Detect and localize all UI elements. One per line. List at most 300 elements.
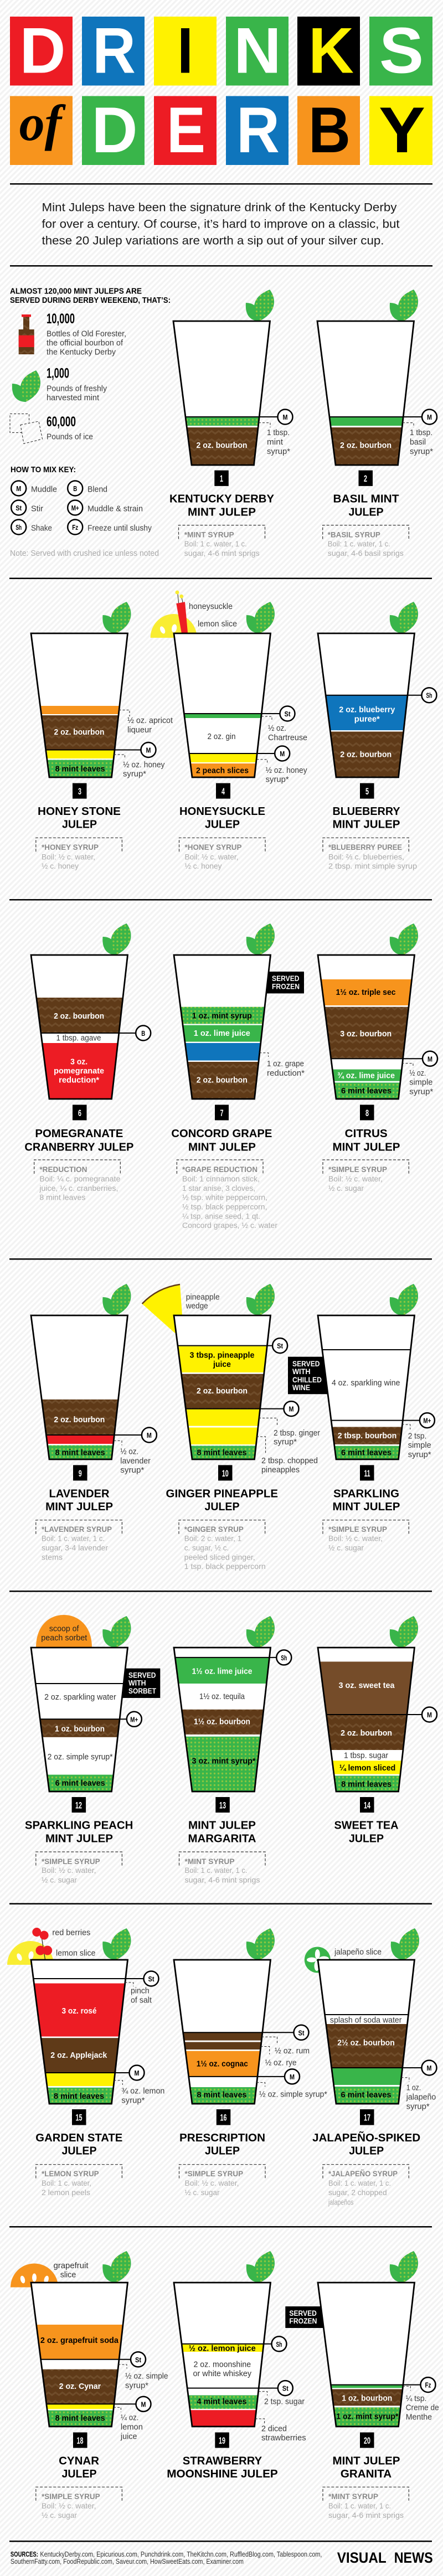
key note: Note: Served with crushed ice unless noted — [10, 549, 159, 558]
glass 20: Menthe — [406, 2412, 432, 2422]
recipe 7: ¼ tsp. anise seed, 1 qt. — [182, 1211, 260, 1220]
recipe 4 — [179, 838, 265, 870]
number badge 4 — [216, 783, 230, 799]
glass 8 — [318, 923, 437, 1099]
key: freeze — [68, 519, 152, 535]
recipe 3 — [36, 838, 122, 870]
stats heading — [10, 287, 171, 305]
drink title 4: JULEP — [205, 818, 240, 831]
glass 12: 2 oz. sparkling water — [44, 1692, 116, 1702]
drink title 15 — [35, 2131, 122, 2157]
recipe 15: 2 lemon peels — [42, 2188, 90, 2197]
glass 13: 3 oz. mint syrup* — [192, 1756, 256, 1765]
number badge 16: 16 — [220, 2113, 227, 2123]
glass 20: 1 oz. bourbon — [342, 2394, 392, 2403]
garnish: peach sorbet scoop — [36, 1615, 92, 1648]
recipe 17: *JALAPEÑO SYRUP — [328, 2169, 398, 2178]
glass 15: M — [134, 2069, 140, 2077]
glass 18: 8 mint leaves — [55, 2414, 105, 2423]
number badge 2: 2 — [364, 473, 367, 484]
drink title 16 — [179, 2131, 265, 2157]
glass 18: slice — [60, 2270, 76, 2280]
glass 10: 3 tbsp. pineapple — [189, 1350, 255, 1360]
recipe 2: sugar, 4-6 basil sprigs — [328, 549, 404, 557]
drink 10: Ginger Pineapple Julep — [142, 1284, 320, 1571]
key: stir: Stir — [31, 504, 43, 514]
glass 11: syrup* — [408, 1450, 431, 1459]
recipe 1: *MINT SYRUP — [184, 530, 234, 539]
number badge 3 — [73, 783, 86, 799]
number badge 7: 7 — [220, 1108, 224, 1118]
glass 18: 2 oz. Cynar — [59, 2382, 101, 2391]
glass 11: 6 mint leaves — [341, 1448, 392, 1457]
callout: served frozen: FROZEN — [272, 983, 300, 991]
drink title 9 — [45, 1487, 113, 1513]
drink title 7 — [171, 1127, 272, 1154]
glass 4: 2 peach slices — [196, 766, 249, 776]
logo: Visual News: NEWS — [394, 2549, 433, 2566]
glass 16: ½ oz. simple syrup* — [259, 2090, 327, 2099]
key: muddle: Muddle — [31, 485, 57, 494]
glass 16: ½ oz. rye — [265, 2058, 297, 2068]
glass 6: reduction* — [59, 1075, 99, 1085]
glass 12: 2 oz. simple syrup* — [48, 1752, 113, 1762]
drink 12: Sparkling Peach Mint Julep — [25, 1615, 160, 1884]
drink title 7: CONCORD GRAPE — [171, 1127, 272, 1140]
recipe 9: sugar, 3-4 lavender — [42, 1543, 108, 1552]
stat: mint: Pounds of freshly — [47, 384, 107, 393]
callout: served with chilled wine: WITH — [292, 1367, 311, 1376]
drink title 6: POMEGRANATE — [35, 1127, 123, 1140]
logo: Visual News: VISUAL — [337, 2549, 387, 2566]
drink title 18 — [59, 2454, 99, 2480]
glass 5: 2 oz. blueberry — [339, 705, 395, 714]
glass 13: 1½ oz. bourbon — [194, 1717, 250, 1727]
number badge 9 — [73, 1465, 87, 1480]
recipe 17: Boil: 1 c. water, 1 c. — [328, 2178, 391, 2187]
glass 16: 1½ oz. cognac — [197, 2059, 248, 2068]
number badge 1: 1 — [220, 473, 223, 484]
recipe 18: Boil: ½ c. water, — [42, 2501, 96, 2510]
glass 4: ½ oz. — [268, 724, 286, 733]
garnish: jalapeno slice — [305, 1947, 331, 1973]
drink title 20: MINT JULEP — [332, 2454, 400, 2467]
number badge 2 — [359, 471, 373, 486]
recipe 8: ½ c. sugar — [328, 1184, 364, 1193]
glass 4: M — [280, 750, 285, 758]
drink title 4 — [179, 805, 265, 831]
key: freeze: Fz — [72, 523, 79, 531]
recipe 7: Concord grapes, ½ c. water — [182, 1221, 277, 1230]
recipe 20 — [323, 2487, 409, 2520]
key: muddle and strain: M+ — [71, 504, 79, 512]
drink title 20 — [332, 2454, 400, 2480]
stat: bottles — [47, 311, 126, 357]
recipe 3: Boil: ½ c. water, — [42, 852, 95, 861]
glass 15: pinch — [131, 1986, 150, 1995]
number badge 16 — [217, 2109, 230, 2125]
drink title 2: JULEP — [349, 505, 383, 518]
drink title 9: LAVENDER — [49, 1487, 110, 1500]
recipe 10 — [179, 1520, 266, 1571]
glass 6: 2 oz. bourbon — [54, 1011, 104, 1021]
recipe 10: c. sugar, ½ c. — [184, 1543, 229, 1552]
glass 18: juice — [120, 2432, 137, 2441]
drink title 8: CITRUS — [345, 1127, 388, 1140]
recipe 12: *SIMPLE SYRUP — [42, 1857, 100, 1866]
recipe 2: Boil: 1 c. water, 1 c. — [328, 539, 390, 548]
callout: served with sorbet: WITH — [128, 1679, 146, 1687]
glass 12: 6 mint leaves — [55, 1778, 105, 1788]
glass 2: 1 tbsp. — [410, 428, 432, 437]
glass 5: Sh — [426, 691, 432, 700]
drink 16: Prescription Julep — [174, 1928, 327, 2197]
glass 3: 2 oz. bourbon — [54, 727, 104, 737]
recipe 5: Boil: ⅔ c. blueberries, — [328, 852, 404, 861]
glass 9: M — [147, 1431, 152, 1439]
panel: stats — [10, 287, 171, 443]
glass 18: St — [135, 2356, 142, 2364]
glass 8: 3 oz. bourbon — [340, 1029, 392, 1039]
glass 4: syrup* — [266, 775, 289, 784]
glass 11: simple — [408, 1441, 431, 1450]
recipe 15 — [36, 2165, 122, 2197]
glass 14 — [318, 1616, 437, 1792]
number badge 1 — [214, 471, 229, 486]
glass 7: 1 oz. grape — [267, 1059, 304, 1068]
number badge 14 — [360, 1797, 374, 1813]
key heading: HOW TO MIX KEY: — [11, 465, 76, 474]
drink title 13 — [188, 1819, 256, 1845]
drink title 11: MINT JULEP — [332, 1500, 400, 1513]
glass 19: 2 oz. moonshine — [194, 2360, 251, 2369]
glass 11: 2 tbsp. bourbon — [338, 1431, 396, 1441]
drink title 15: JULEP — [62, 2145, 96, 2157]
drink title 19: MOONSHINE JULEP — [167, 2467, 278, 2480]
glass 19: 4 mint leaves — [197, 2397, 247, 2406]
drink title 14 — [334, 1819, 399, 1845]
key: blend: B — [73, 484, 77, 493]
drink title 11: SPARKLING — [333, 1487, 399, 1500]
drink title 18: JULEP — [62, 2467, 96, 2480]
glass 8: ¾ oz. lime juice — [337, 1071, 395, 1081]
number badge 15 — [72, 2109, 86, 2125]
glass 3: 8 mint leaves — [55, 764, 105, 774]
title: Drinks of Derby — [10, 14, 432, 166]
drink title 6 — [24, 1127, 133, 1154]
recipe 15: Boil: 1 c. water, — [42, 2178, 91, 2187]
glass 18: ½ oz. simple — [125, 2372, 168, 2381]
stat: bottles: the Kentucky Derby — [47, 348, 116, 357]
recipe 18: *SIMPLE SYRUP — [42, 2492, 100, 2501]
key: freeze: Freeze until slushy — [87, 524, 152, 533]
drink title 2: BASIL MINT — [333, 493, 399, 505]
drink title 19: STRAWBERRY — [183, 2454, 262, 2467]
glass 15: of salt — [131, 1996, 152, 2005]
recipe 5: *BLUEBERRY PUREE — [328, 843, 402, 851]
glass 2 — [317, 290, 437, 465]
recipe 9: stems — [42, 1552, 63, 1561]
recipe 7 — [177, 1160, 277, 1230]
glass 15: syrup* — [121, 2095, 145, 2105]
glass 20: 1 oz. mint syrup* — [336, 2412, 398, 2422]
drink 5: Blueberry Mint Julep — [318, 602, 436, 870]
drink title 8 — [332, 1127, 400, 1154]
title tiles row 1: N — [234, 14, 281, 87]
glass 16: ½ oz. rum — [275, 2046, 310, 2056]
glass 18: 2 oz. grapefruit soda — [40, 2336, 119, 2345]
glass 16: 8 mint leaves — [197, 2090, 247, 2099]
recipe 8: *SIMPLE SYRUP — [328, 1165, 387, 1174]
drink title 3: JULEP — [62, 818, 97, 831]
key: muddle and strain — [68, 500, 143, 515]
title tiles row 2: of — [19, 95, 66, 151]
drink 4: Honeysuckle Julep — [151, 590, 307, 870]
glass 14: 8 mint leaves — [341, 1779, 392, 1789]
drink title 17: JALAPEÑO-SPIKED — [312, 2131, 420, 2144]
recipe 2 — [323, 525, 409, 557]
glass 4 — [151, 590, 307, 784]
number badge 19: 19 — [219, 2435, 225, 2446]
glass 3: ½ oz. honey — [123, 760, 165, 770]
recipe 8 — [323, 1160, 409, 1193]
glass 18 — [11, 2251, 168, 2441]
glass 15: 3 oz. rosé — [62, 2006, 96, 2016]
recipe 5 — [323, 838, 417, 870]
glass 4: honeysuckle — [189, 602, 233, 611]
glass 1: syrup* — [267, 447, 290, 456]
number badge 9: 9 — [79, 1468, 82, 1479]
glass 17 — [305, 1928, 436, 2111]
key: stir — [11, 500, 43, 515]
number badge 10 — [218, 1465, 233, 1480]
glass 20: ¼ tsp. — [406, 2394, 426, 2403]
drink title 3 — [38, 805, 121, 831]
drink title 16: JULEP — [205, 2145, 240, 2157]
glass 14: ¼ lemon sliced — [339, 1763, 395, 1773]
glass 10: syrup* — [274, 1437, 297, 1447]
stat: ice — [47, 414, 93, 442]
drink 11: Sparkling Mint Julep — [288, 1284, 435, 1552]
callout: served frozen — [285, 2306, 323, 2328]
sources: SOURCES: — [11, 2550, 38, 2558]
number badge 11 — [360, 1465, 374, 1480]
glass 1: 2 oz. bourbon — [196, 441, 247, 450]
glass 9: 8 mint leaves — [55, 1448, 105, 1457]
recipe 9 — [36, 1520, 122, 1561]
number badge 18: 18 — [76, 2435, 83, 2446]
callout: served with chilled wine — [288, 1357, 328, 1394]
glass 14: 3 oz. sweet tea — [339, 1681, 395, 1690]
drink title 12 — [25, 1819, 133, 1845]
glass 7: 1 oz. mint syrup — [192, 1011, 252, 1020]
key: muddle — [11, 481, 57, 496]
drink title 6: CRANBERRY JULEP — [24, 1141, 133, 1154]
stat: mint — [47, 365, 107, 402]
drink title 14: JULEP — [349, 1832, 384, 1845]
drink title 10 — [166, 1487, 278, 1513]
title tiles row 2: Y — [379, 94, 425, 166]
recipe 8: Boil: ½ c. water, — [328, 1174, 383, 1183]
recipe 1: Boil: 1 c. water, 1 c. — [184, 539, 247, 548]
number badge 6 — [73, 1105, 86, 1121]
glass 7: 1 oz. lime juice — [194, 1029, 250, 1038]
recipe 20: Boil: 1 c. water, 1 c. — [328, 2501, 391, 2510]
recipe 6: Boil: ¼ c. pomegranate — [39, 1174, 121, 1183]
panel: how to mix key — [10, 465, 159, 558]
glass 1 — [173, 290, 292, 465]
number badge 10: 10 — [222, 1468, 229, 1479]
glass 8: 1½ oz. triple sec — [336, 988, 395, 997]
glass 17: syrup* — [406, 2102, 430, 2111]
recipe 11: Boil: ½ c. water, — [328, 1534, 383, 1543]
recipe 13: sugar, 4-6 mint sprigs — [185, 1875, 260, 1884]
glass 8: simple — [409, 1078, 432, 1087]
recipe 1 — [178, 525, 265, 557]
glass 11: 2 tsp. — [408, 1432, 426, 1441]
key: shake: Shake — [31, 524, 52, 533]
title tiles row 2: D — [92, 94, 137, 166]
drink title 13: MARGARITA — [188, 1832, 256, 1845]
drink title 5: MINT JULEP — [332, 818, 400, 831]
glass 6: pomegranate — [54, 1066, 104, 1076]
stat: mint: 1,000 — [47, 365, 69, 381]
number badge 11: 11 — [364, 1468, 370, 1479]
glass 16 — [174, 1928, 327, 2104]
key: blend: Blend — [87, 485, 107, 494]
glass 19: ½ oz. lemon juice — [189, 2343, 256, 2353]
drink title 1: MINT JULEP — [188, 505, 256, 518]
title tiles row 1: I — [177, 14, 193, 87]
callout: served frozen: FROZEN — [289, 2317, 317, 2325]
glass 4: lemon slice — [198, 619, 237, 628]
recipe 16 — [179, 2165, 265, 2197]
key: muddle and strain: Muddle & strain — [87, 504, 143, 514]
drink 14: Sweet Tea Julep — [318, 1616, 437, 1845]
stat: bottles: Bottles of Old Forester, — [47, 329, 126, 339]
drink title 11 — [332, 1487, 400, 1513]
drink title 2 — [333, 493, 399, 518]
recipe 7: ½ tsp. black peppercorn, — [182, 1202, 267, 1211]
glass 20 — [285, 2251, 439, 2427]
glass 3: ½ oz. apricot — [127, 716, 173, 725]
glass 14: 2 oz. bourbon — [341, 1728, 392, 1738]
drink 9: Lavender Mint Julep — [31, 1284, 157, 1561]
glass 12: 1 oz. bourbon — [55, 1724, 105, 1733]
glass 10: St — [277, 1342, 284, 1350]
glass 8: 6 mint leaves — [341, 1086, 392, 1096]
glass 17: jalapeño slice — [334, 1947, 382, 1956]
glass 15: red berries — [52, 1928, 90, 1938]
recipe 6: juice, ¼ c. cranberries, — [39, 1184, 118, 1193]
glass 4: Chartreuse — [268, 733, 307, 742]
stat: bottles: the official bourbon of — [47, 338, 123, 348]
title tiles row 2: R — [236, 94, 280, 166]
intro text: these 20 Julep variations are worth a sip out of your silver cup. — [42, 235, 384, 247]
drink 20: Mint Julep Granita — [285, 2251, 439, 2520]
glass 17: 6 mint leaves — [341, 2090, 391, 2099]
glass 13: 1½ oz. lime juice — [192, 1666, 253, 1676]
drink title 5: BLUEBERRY — [332, 805, 400, 818]
recipe 13: Boil: 1 c. water, 1 c. — [185, 1866, 247, 1875]
title tiles row 1: D — [20, 14, 65, 87]
recipe 10: Boil: 2 c. water, 1 — [184, 1534, 241, 1543]
key: shake — [11, 519, 52, 535]
glass 2: 2 oz. bourbon — [340, 441, 392, 450]
glass 15: lemon slice — [56, 1949, 95, 1958]
glass 4: 2 oz. gin — [207, 732, 236, 741]
garnish: lemon slice and red berries — [7, 1928, 54, 1965]
recipe 3: ½ c. honey — [42, 861, 79, 870]
recipe 20: sugar, 4-6 mint sprigs — [328, 2511, 404, 2520]
recipe 6: *REDUCTION — [39, 1165, 87, 1174]
sources: SouthernFatty.com, FoodRepublic.com, Saveur.com, HowSweetEats.com, Examiner.com — [11, 2557, 244, 2565]
icon: mint leaf — [12, 370, 40, 402]
drink title 16: PRESCRIPTION — [179, 2131, 265, 2144]
sources: KentuckyDerby.com, Epicurious.com, Punchdrink.com, TheKitchn.com, RuffledBlog.com, Tablespoon.com, — [40, 2550, 322, 2558]
recipe 16: ½ c. sugar — [185, 2188, 220, 2197]
icon: ice cubes — [10, 414, 42, 443]
glass 11 — [288, 1284, 435, 1459]
glass 9: lavender — [120, 1456, 151, 1466]
glass 13: 1½ oz. tequila — [199, 1692, 245, 1701]
recipe 15: *LEMON SYRUP — [42, 2169, 99, 2178]
stat: mint: harvested mint — [47, 393, 100, 402]
title tiles row 2 — [10, 94, 432, 166]
stat: ice: 60,000 — [47, 414, 76, 430]
glass 19: strawberries — [261, 2433, 306, 2443]
number badge 6: 6 — [78, 1108, 81, 1118]
glass 19: 2 diced — [261, 2424, 287, 2434]
stat: ice: Pounds of ice — [47, 432, 93, 442]
glass 14: M — [427, 1711, 432, 1719]
number badge 18 — [73, 2433, 87, 2448]
drink title 17: JULEP — [349, 2145, 384, 2157]
recipe 2: *BASIL SYRUP — [328, 530, 380, 539]
intro text: Mint Juleps have been the signature drink of the Kentucky Derby — [42, 202, 397, 214]
recipe 3: *HONEY SYRUP — [42, 843, 99, 851]
drink 3: Honey Stone Julep — [31, 602, 173, 870]
drink title 10: GINGER PINEAPPLE — [166, 1487, 278, 1500]
recipe 12: ½ c. sugar — [42, 1875, 77, 1884]
glass 1: mint — [267, 437, 284, 447]
number badge 14: 14 — [364, 1800, 370, 1810]
drink 7: Concord Grape Mint Julep — [171, 923, 305, 1230]
glass 19: 2 tsp. sugar — [264, 2397, 305, 2407]
glass 10: 2 tbsp. ginger — [274, 1428, 320, 1438]
recipe 11: ½ c. sugar — [328, 1543, 364, 1552]
sources — [11, 2550, 322, 2565]
glass 8: ½ oz. — [409, 1068, 426, 1078]
recipe 4: ½ c. honey — [185, 861, 222, 870]
drink 19: Strawberry Moonshine Julep — [167, 2251, 306, 2480]
drink title 1 — [169, 493, 274, 518]
glass 18: grapefruit — [53, 2261, 89, 2270]
recipe 4: Boil: ½ c. water, — [185, 852, 238, 861]
recipe 10: 1 tsp. black peppercorn — [184, 1562, 266, 1571]
number badge 13: 13 — [219, 1800, 226, 1810]
number badge 5: 5 — [365, 786, 369, 797]
drink title 9: MINT JULEP — [45, 1500, 113, 1513]
glass 20: Creme de — [406, 2403, 439, 2413]
glass 2: syrup* — [410, 447, 433, 456]
drink 1: Kentucky Derby Mint Julep — [169, 290, 292, 557]
glass 10: wedge — [186, 1302, 208, 1311]
intro text — [42, 202, 400, 247]
glass 6: 1 tbsp. agave — [56, 1034, 101, 1043]
glass 18: M — [141, 2400, 146, 2408]
number badge 15: 15 — [75, 2113, 82, 2123]
